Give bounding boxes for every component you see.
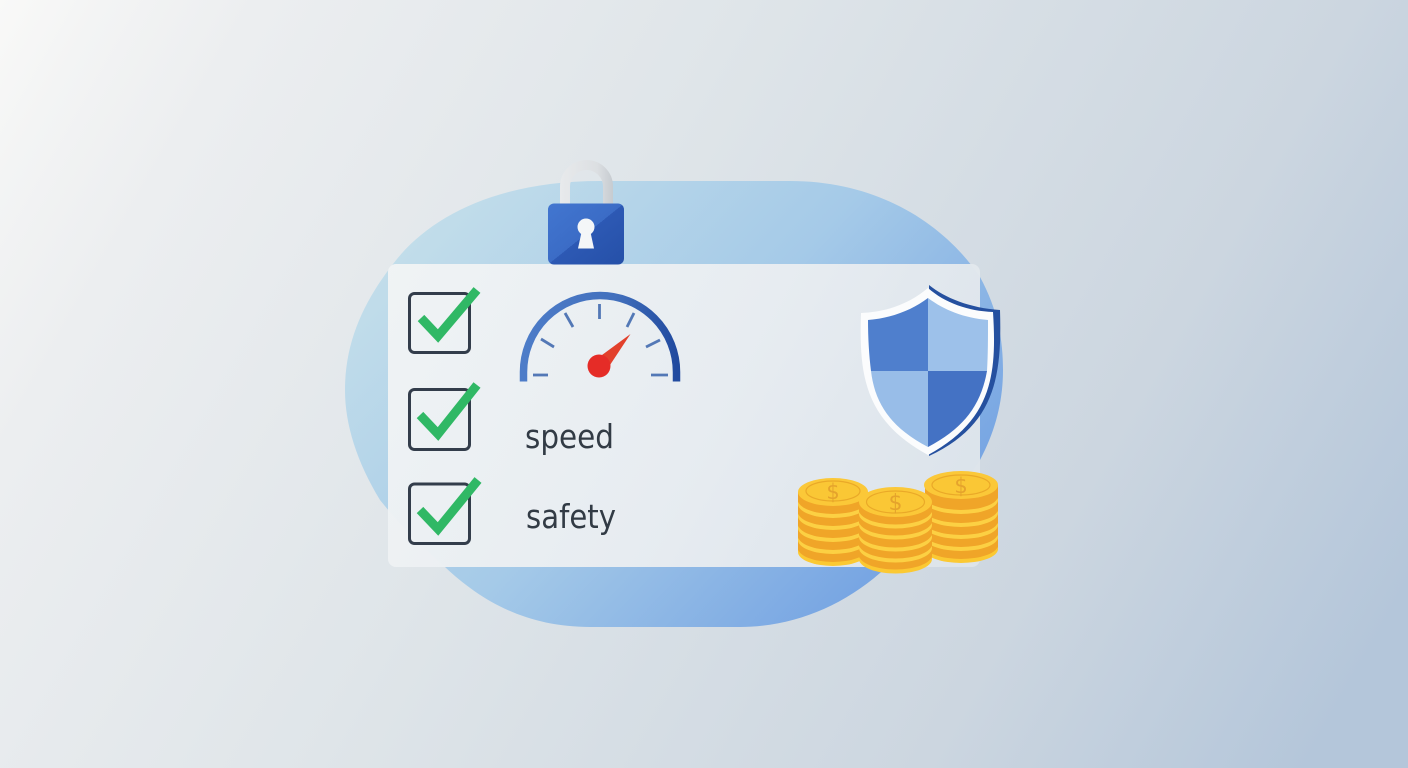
panel: checklist card xyxy=(388,264,980,567)
icon: padlock xyxy=(548,165,624,264)
icon: coin stacks xyxy=(798,471,998,574)
label: safety: safety xyxy=(526,497,616,536)
coin stack right: $ xyxy=(954,474,968,498)
coin stack left xyxy=(798,478,868,566)
checkbox row 2 xyxy=(410,385,477,450)
coin stack right xyxy=(924,471,998,563)
blue blob backdrop xyxy=(345,181,1003,627)
label: speed: speed xyxy=(525,417,614,456)
coin stack middle xyxy=(859,487,932,574)
checkbox row 1 xyxy=(410,290,477,352)
icon: shield xyxy=(861,285,1000,456)
checkbox row 3 xyxy=(410,480,478,544)
icon: speedometer gauge xyxy=(524,296,676,382)
coin stack left: $ xyxy=(826,480,840,504)
coin stack middle: $ xyxy=(888,491,902,516)
